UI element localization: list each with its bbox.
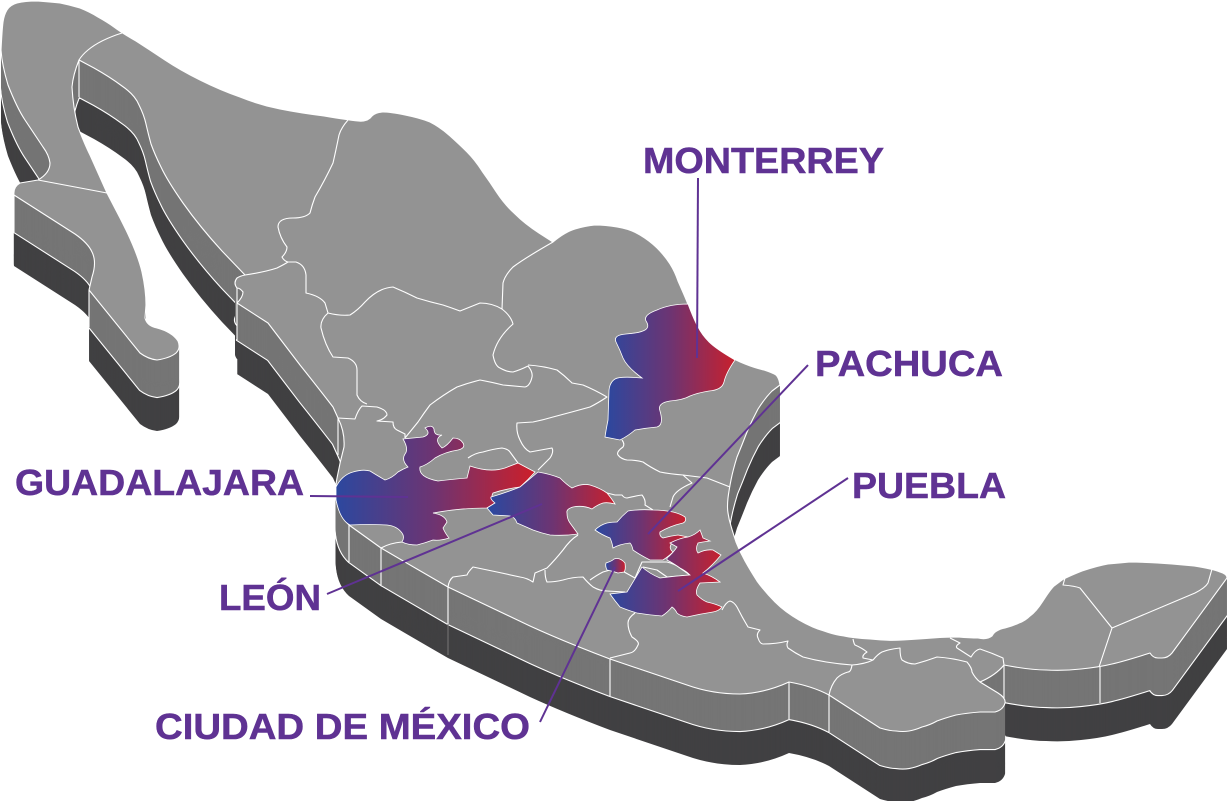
region: Monterrey [605,304,735,440]
label: Monterrey: MONTERREY [643,140,884,181]
wall vertical state dividers [14,60,1100,732]
region: Puebla [610,530,722,617]
label: Guadalajara: GUADALAJARA [15,462,304,503]
state borders [38,33,1212,695]
leader line: Monterrey [697,178,698,358]
label: Puebla: PUEBLA [852,465,1006,506]
leader line: Guadalajara [310,496,408,497]
region: Pachuca [595,510,688,560]
label: León: LEÓN [219,576,321,618]
leader line: Pachuca [648,365,808,534]
label: Ciudad de México: CIUDAD DE MÉXICO [155,706,530,747]
leader line: León [327,504,542,594]
leader line: Ciudad de México [540,567,615,722]
region: Guadalajara [336,426,535,545]
region: Ciudad de México [606,558,625,573]
leader line: Puebla [678,478,848,591]
label: Pachuca: PACHUCA [815,343,1003,384]
region: León [487,472,615,535]
